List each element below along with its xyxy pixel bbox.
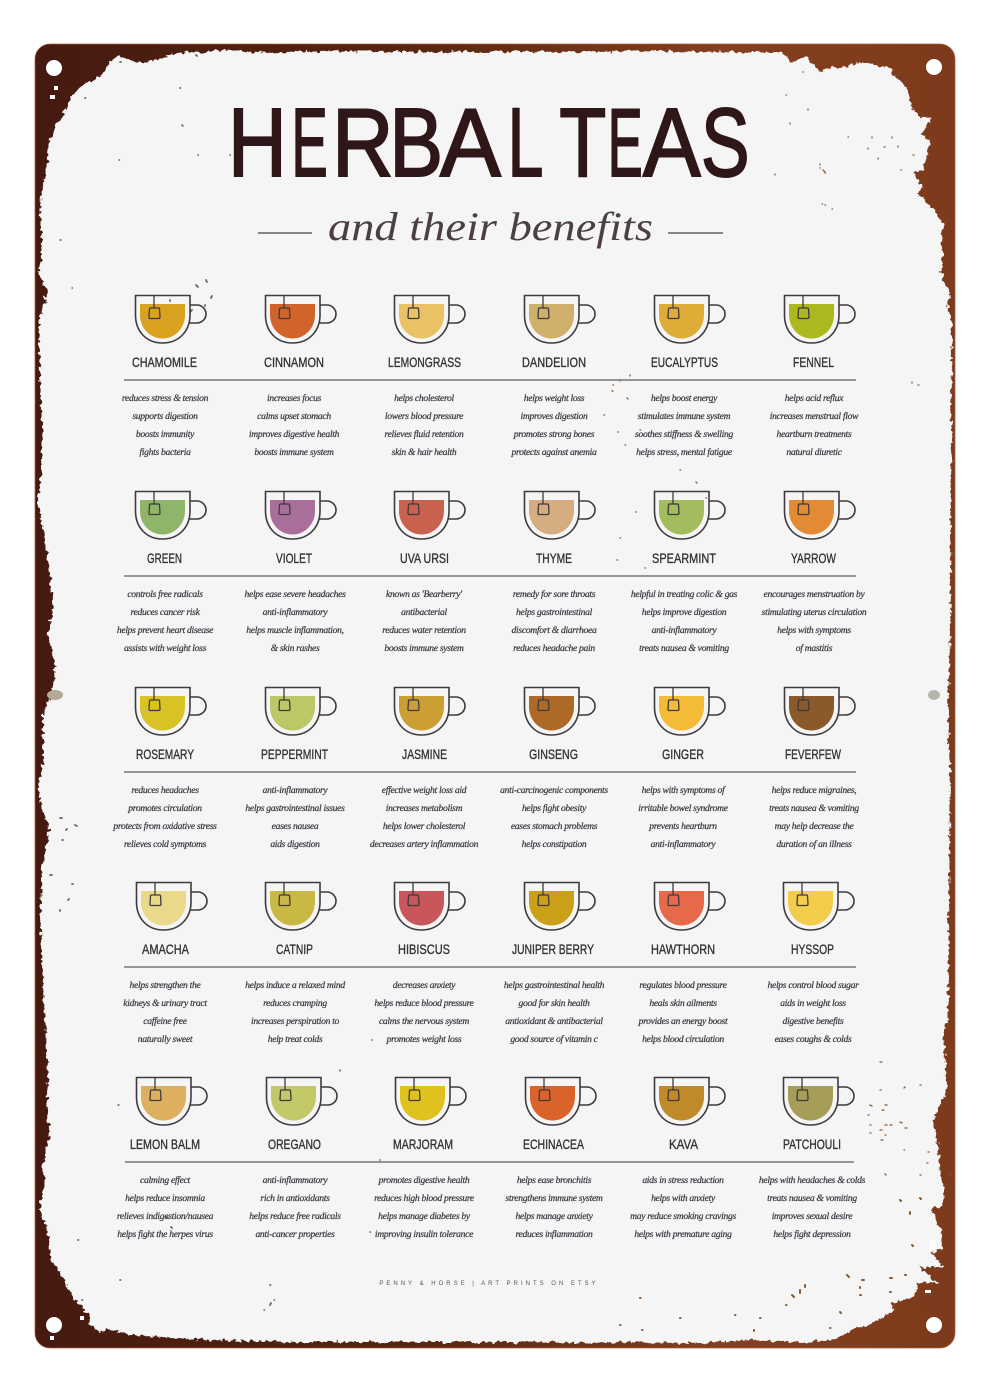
title: R [332,89,394,197]
benefits: echinacea: reduces inflammation [515,1229,593,1240]
benefits: spearmint: helpful in treating colic & gas [631,589,738,600]
tea row 1 [122,295,859,458]
benefits: echinacea: helps ease bronchitis [517,1175,592,1186]
tea: hibiscus [374,882,475,1045]
label: ginseng: GINSENG [529,746,578,762]
benefits: violet: helps ease severe headaches [244,589,346,600]
label: chamomile: CHAMOMILE [132,354,197,370]
benefits: ginger: irritable bowel syndrome [638,803,729,814]
tea: lemon balm [117,1077,214,1240]
benefits: juniper berry: helps gastrointestinal health [504,980,605,991]
benefits: rosemary: protects from oxidative stress [112,821,217,832]
icon: lemongrass cup [394,295,465,343]
icon: yarrow cup [784,491,855,539]
label: yarrow: YARROW [791,550,837,566]
benefits: jasmine: effective weight loss aid [382,785,467,796]
benefits: eucalyptus: stimulates immune system [638,411,731,422]
benefits: dandelion: improves digestion [520,411,588,422]
label: hyssop: HYSSOP [791,941,834,957]
icon: fennel cup [784,295,855,343]
icon: peppermint cup [266,687,336,735]
benefits: feverfew: helps reduce migraines, [772,785,856,796]
tea: marjoram [374,1077,475,1240]
benefits: jasmine: decreases artery inflammation [370,839,479,850]
tea: jasmine [370,687,479,850]
benefits: hawthorn: helps blood circulation [642,1034,724,1045]
label: dandelion: DANDELION [522,354,586,370]
label: lemon balm: LEMON BALM [130,1136,200,1152]
benefits: oregano: rich in antioxidants [260,1193,330,1204]
benefits: lemon balm: relieves indigestion/nausea [117,1211,214,1222]
benefits: hyssop: eases coughs & colds [775,1034,852,1045]
title: A [643,89,701,197]
label: feverfew: FEVERFEW [785,746,842,762]
benefits: amacha: helps strengthen the [130,980,201,991]
icon: patchouli cup [784,1077,854,1125]
label: marjoram: MARJORAM [393,1136,453,1152]
title: H [228,88,287,197]
benefits: thyme: discomfort & diarrhoea [512,625,597,636]
tea: violet [244,491,346,654]
benefits: hibiscus: calms the nervous system [379,1016,469,1027]
benefits: patchouli: helps with headaches & colds [759,1175,866,1186]
benefits: violet: anti-inflammatory [263,607,328,618]
tea: rosemary [112,687,217,850]
benefits: amacha: naturally sweet [138,1034,193,1045]
benefits: lemon balm: calming effect [140,1175,191,1186]
benefits: uva ursi: boosts immune system [384,643,464,654]
benefits: juniper berry: antioxidant & antibacterial [505,1016,603,1027]
icon: hawthorn cup [654,882,725,930]
title: L [508,90,543,197]
benefits: green: assists with weight loss [124,643,207,654]
tea: dandelion [511,295,597,458]
tea row 4 [123,882,859,1045]
benefits: uva ursi: antibacterial [401,607,447,618]
icon: echinacea cup [526,1077,596,1125]
benefits: echinacea: helps manage anxiety [515,1211,594,1222]
benefits: hawthorn: provides an energy boost [638,1016,728,1027]
benefits: green: helps prevent heart disease [117,625,214,636]
benefits: marjoram: promotes digestive health [378,1175,470,1186]
label: oregano: OREGANO [268,1136,321,1152]
benefits: lemongrass: helps cholesterol [394,393,455,404]
icon: cinnamon cup [266,295,336,343]
benefits: lemon balm: helps fight the herpes virus [117,1229,213,1240]
benefits: rosemary: reduces headaches [131,785,199,796]
benefits: uva ursi: known as 'Bearberry' [386,589,463,600]
tea row 2 [117,491,867,654]
benefits: jasmine: increases metabolism [386,803,463,814]
benefits: kava: aids in stress reduction [642,1175,724,1186]
benefits: lemongrass: relieves fluid retention [385,429,464,440]
benefits: hyssop: digestive benefits [783,1016,844,1027]
benefits: catnip: helps induce a relaxed mind [245,980,345,991]
benefits: ginseng: helps fight obesity [522,803,587,814]
benefits: fennel: increases menstrual flow [770,411,859,422]
benefits: hibiscus: helps reduce blood pressure [374,998,475,1009]
icon: green cup [136,491,206,539]
benefits: hawthorn: heals skin ailments [649,998,717,1009]
icon: hyssop cup [784,882,854,930]
icon: feverfew cup [784,687,855,735]
icon: rosemary cup [136,687,206,735]
benefits: patchouli: treats nausea & vomiting [767,1193,857,1204]
icon: catnip cup [266,882,336,930]
title [228,88,750,197]
benefits: ginger: helps with symptoms of [642,785,726,796]
benefits: yarrow: helps with symptoms [777,625,851,636]
label: rosemary: ROSEMARY [136,746,194,762]
icon: chamomile cup [136,295,206,343]
benefits: feverfew: may help decrease the [775,821,854,832]
benefits: hawthorn: regulates blood pressure [639,980,728,991]
benefits: juniper berry: good for skin health [518,998,590,1009]
label: lemongrass: LEMONGRASS [388,354,461,370]
tea: echinacea [505,1077,603,1240]
label: patchouli: PATCHOULI [783,1136,841,1152]
icon: eucalyptus cup [654,295,725,343]
row dividers [124,380,856,1162]
benefits: catnip: help treat colds [268,1034,323,1045]
benefits: cinnamon: increases focus [267,393,322,404]
benefits: ginger: anti-inflammatory [651,839,716,850]
benefits: peppermint: helps gastrointestinal issues [245,803,345,814]
icon: amacha cup [136,882,207,930]
tea: green [117,491,214,654]
benefits: hyssop: helps control blood sugar [767,980,859,991]
benefits: cinnamon: boosts immune system [254,447,334,458]
benefits: uva ursi: reduces water retention [382,625,466,636]
benefits: feverfew: duration of an illness [776,839,852,850]
title: T [559,88,606,197]
benefits: chamomile: supports digestion [132,411,198,422]
label: eucalyptus: EUCALYPTUS [651,354,718,370]
benefits: oregano: anti-cancer properties [255,1229,335,1240]
title: E [608,88,643,197]
label: catnip: CATNIP [276,941,313,957]
benefits: peppermint: anti-inflammatory [263,785,328,796]
benefits: juniper berry: good source of vitamin c [510,1034,599,1045]
benefits: chamomile: fights bacteria [139,447,191,458]
benefits: spearmint: treats nausea & vomiting [639,643,729,654]
benefits: oregano: helps reduce free radicals [249,1211,341,1222]
benefits: dandelion: protects against anemia [511,447,597,458]
benefits: cinnamon: calms upset stomach [257,411,331,422]
benefits: fennel: heartburn treatments [777,429,852,440]
tea: juniper berry [504,882,605,1045]
icon: hibiscus cup [394,882,465,930]
icon: marjoram cup [396,1077,466,1125]
tea: fennel [770,295,859,458]
benefits: rosemary: relieves cold symptoms [124,839,207,850]
icon: jasmine cup [394,687,465,735]
benefits: kava: helps with anxiety [651,1193,716,1204]
benefits: hyssop: aids in weight loss [780,998,846,1009]
benefits: spearmint: anti-inflammatory [652,625,717,636]
tea: spearmint [631,491,738,654]
benefits: yarrow: encourages menstruation by [764,589,865,600]
tea: peppermint [245,687,345,850]
benefits: kava: may reduce smoking cravings [630,1211,736,1222]
benefits: thyme: remedy for sore throats [513,589,596,600]
tea: kava [630,1077,736,1240]
benefits: dandelion: promotes strong bones [513,429,595,440]
footer credit: PENNY & HORSE | ART PRINTS ON ETSY [379,1281,599,1287]
label: spearmint: SPEARMINT [652,550,716,566]
benefits: patchouli: helps fight depression [773,1229,851,1240]
benefits: ginseng: eases stomach problems [511,821,598,832]
benefits: oregano: anti-inflammatory [263,1175,328,1186]
benefits: dandelion: helps weight loss [524,393,585,404]
tea: oregano [249,1077,341,1240]
icon: juniper berry cup [524,882,595,930]
tea: uva ursi [382,491,466,654]
benefits: peppermint: eases nausea [272,821,319,832]
title: E [292,88,328,197]
tea: yarrow [762,491,867,654]
label: amacha: AMACHA [142,941,190,957]
label: fennel: FENNEL [793,354,834,370]
benefits: ginseng: anti-carcinogenic components [500,785,608,796]
label: ginger: GINGER [662,746,704,762]
title: B [389,88,443,197]
label: violet: VIOLET [276,550,312,566]
benefits: eucalyptus: helps boost energy [651,393,718,404]
label: juniper berry: JUNIPER BERRY [512,941,594,957]
benefits: thyme: reduces headache pain [513,643,595,654]
icon: thyme cup [524,491,595,539]
tea: hawthorn [638,882,728,1045]
benefits: fennel: natural diuretic [786,447,843,458]
benefits: hibiscus: decreases anxiety [393,980,456,991]
benefits: green: reduces cancer risk [130,607,201,618]
benefits: eucalyptus: helps stress, mental fatigue [636,447,733,458]
benefits: lemongrass: skin & hair health [392,447,457,458]
label: hibiscus: HIBISCUS [398,941,450,957]
benefits: chamomile: boosts immunity [136,429,195,440]
icon: violet cup [266,491,336,539]
benefits: violet: & skin rashes [271,643,320,654]
label: kava: KAVA [669,1136,699,1152]
title: A [440,88,501,197]
benefits: rosemary: promotes circulation [127,803,202,814]
icon: kava cup [654,1077,725,1125]
label: uva ursi: UVA URSI [400,550,449,566]
icon: ginseng cup [524,687,595,735]
benefits: echinacea: strengthens immune system [505,1193,603,1204]
tea: chamomile [122,295,209,458]
tea row 3 [112,687,859,850]
benefits: ginseng: helps constipation [522,839,587,850]
tea: eucalyptus [635,295,733,458]
icon: uva ursi cup [394,491,465,539]
label: thyme: THYME [536,550,572,566]
benefits: green: controls free radicals [127,589,203,600]
benefits: marjoram: reduces high blood pressure [374,1193,475,1204]
benefits: fennel: helps acid reflux [785,393,844,404]
benefits: yarrow: of mastitis [796,643,833,654]
benefits: thyme: helps gastrointestinal [516,607,593,618]
label: peppermint: PEPPERMINT [261,746,328,762]
benefits: cinnamon: improves digestive health [249,429,340,440]
tea: ginseng [500,687,608,850]
tea: lemongrass [385,295,465,458]
benefits: eucalyptus: soothes stiffness & swelling [635,429,733,440]
benefits: spearmint: helps improve digestion [642,607,727,618]
tea: hyssop [767,882,859,1045]
tea: thyme [512,491,597,654]
benefits: marjoram: improving insulin tolerance [375,1229,474,1240]
benefits: patchouli: improves sexual desire [772,1211,853,1222]
icon: oregano cup [266,1077,337,1125]
benefits: lemon balm: helps reduce insomnia [125,1193,205,1204]
benefits: catnip: increases perspiration to [251,1016,340,1027]
benefits: amacha: caffeine free [143,1016,188,1027]
benefits: lemongrass: lowers blood pressure [385,411,464,422]
benefits: marjoram: helps manage diabetes by [378,1211,471,1222]
mid holes [47,690,940,700]
label: echinacea: ECHINACEA [523,1136,584,1152]
title: S [701,89,750,197]
benefits: hibiscus: promotes weight loss [386,1034,462,1045]
tea: feverfew [769,687,859,850]
tea: amacha [123,882,207,1045]
benefits: peppermint: aids digestion [270,839,320,850]
label: hawthorn: HAWTHORN [651,941,715,957]
label: jasmine: JASMINE [402,746,447,762]
tea: cinnamon [249,295,340,458]
icon: lemon balm cup [136,1077,207,1125]
icon: ginger cup [654,687,725,735]
icon: spearmint cup [654,491,725,539]
tea: catnip [245,882,345,1045]
benefits: feverfew: treats nausea & vomiting [769,803,859,814]
benefits: ginger: prevents heartburn [648,821,717,832]
benefits: jasmine: helps lower cholesterol [383,821,466,832]
benefits: catnip: reduces cramping [263,998,327,1009]
tea: patchouli [759,1077,866,1240]
benefits: chamomile: reduces stress & tension [122,393,209,404]
subtitle: and their benefits [328,204,653,249]
benefits: amacha: kidneys & urinary tract [123,998,207,1009]
label: green: GREEN [147,550,182,566]
tea: ginger [638,687,729,850]
tea row 5 [117,1077,866,1240]
benefits: violet: helps muscle inflammation, [246,625,344,636]
icon: dandelion cup [524,295,595,343]
label: cinnamon: CINNAMON [264,354,324,370]
benefits: kava: helps with premature aging [634,1229,732,1240]
benefits: yarrow: stimulating uterus circulation [762,607,867,618]
